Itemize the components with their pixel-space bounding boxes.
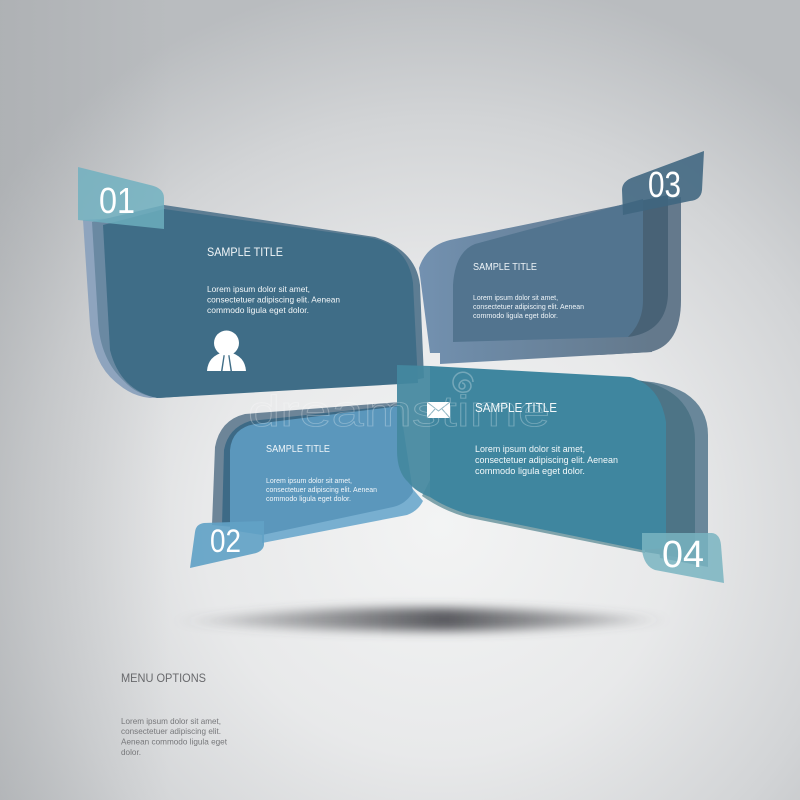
panel 02 dark layer <box>222 405 400 530</box>
panel 04 body text: commodo ligula eget dolor. <box>475 466 585 476</box>
icon: envelope <box>427 402 450 418</box>
menu body text: dolor. <box>121 747 141 757</box>
panel 01 main face <box>103 209 418 398</box>
panel 03 body text <box>473 295 584 320</box>
panel 01 body text: consectetuer adipiscing elit. Aenean <box>207 294 340 304</box>
panel 03 number: 03 <box>648 164 681 205</box>
panel 04 number tab <box>642 533 724 583</box>
menu heading: MENU OPTIONS <box>121 671 206 685</box>
panel 02 <box>190 402 423 568</box>
panel 04 lower shade layer <box>422 480 645 553</box>
panel 02 number tab <box>190 521 264 568</box>
panel 04 body text: consectetuer adipiscing elit. Aenean <box>475 455 618 465</box>
panel 02 main face <box>230 406 413 535</box>
panel 03 body text: commodo ligula eget dolor. <box>473 313 558 320</box>
panel 04 title: SAMPLE TITLE <box>475 400 557 415</box>
icon: businessman <box>207 330 246 371</box>
panel 03 <box>419 151 704 364</box>
panel 02 outer layer <box>212 402 400 530</box>
watermark: dreamstime <box>248 387 550 436</box>
panel 04 <box>397 365 724 583</box>
panel 01 body text: Lorem ipsum dolor sit amet, <box>207 284 310 294</box>
panel 02 body text: commodo ligula eget dolor. <box>266 496 351 503</box>
panel 01 body text: commodo ligula eget dolor. <box>207 305 309 315</box>
panel 04 body text <box>475 444 618 476</box>
panel 02 body text: consectetuer adipiscing elit. Aenean <box>266 487 377 494</box>
panel 02 number: 02 <box>210 523 241 559</box>
menu body text: Aenean commodo ligula eget <box>121 736 228 746</box>
panel 03 left layer <box>419 200 652 364</box>
panel 01 body text <box>207 284 340 315</box>
menu body text: consectetuer adipiscing elit. <box>121 726 221 736</box>
panel 03 number tab <box>622 151 704 215</box>
panel 01 number tab <box>78 167 164 229</box>
panel 04 dark layer <box>630 379 695 560</box>
watermark <box>248 372 550 436</box>
panel 03 main face <box>453 199 643 342</box>
panel 01 title: SAMPLE TITLE <box>207 245 283 259</box>
panel 04 number: 04 <box>662 534 704 576</box>
panel 01 mid layer <box>92 205 200 398</box>
panel 04 main face <box>430 366 666 550</box>
menu body text: Lorem ipsum dolor sit amet, <box>121 716 221 726</box>
panel 03 outer layer <box>600 197 681 355</box>
panel 03 dark right layer <box>628 195 668 337</box>
panel 03 body text: Lorem ipsum dolor sit amet, <box>473 295 558 302</box>
panel 01 number: 01 <box>99 180 135 221</box>
panel 03 title: SAMPLE TITLE <box>473 262 537 273</box>
panel 04 translucent left band <box>397 365 430 497</box>
panel 02 title: SAMPLE TITLE <box>266 444 330 455</box>
panel 02 body text: Lorem ipsum dolor sit amet, <box>266 478 352 485</box>
panel 04 outer layer <box>640 381 708 567</box>
panel 01 outer layer <box>83 215 190 398</box>
floor shadow <box>182 608 660 631</box>
panel 03 body text: consectetuer adipiscing elit. Aenean <box>473 304 584 311</box>
panel 01 <box>78 167 424 398</box>
panel 02 body text <box>266 478 377 503</box>
panel 04 body text: Lorem ipsum dolor sit amet, <box>475 444 585 454</box>
panel 02 light layer <box>262 480 423 543</box>
panel 01 right layer <box>164 205 424 385</box>
menu body text <box>121 716 228 757</box>
